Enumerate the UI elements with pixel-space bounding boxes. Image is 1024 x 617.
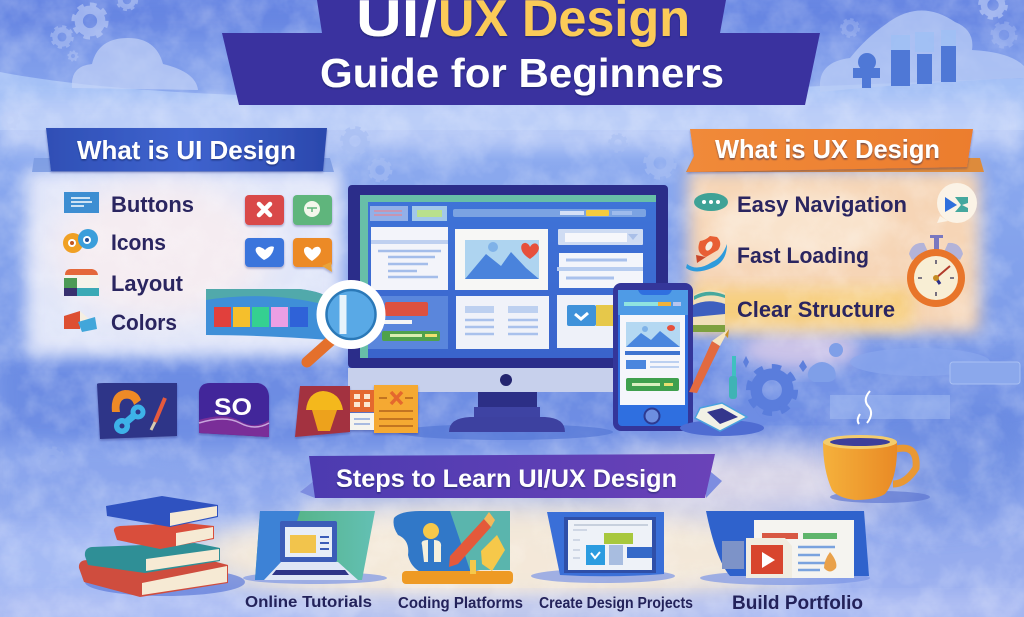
monitor bbox=[348, 185, 668, 440]
book: red middle bbox=[114, 523, 214, 549]
colour palette bar bbox=[206, 289, 330, 340]
step labels: Create Design Projects bbox=[539, 595, 693, 612]
monitor body bbox=[348, 185, 668, 368]
toolbar bbox=[370, 206, 646, 221]
icon: layout bbox=[64, 269, 99, 296]
label: Colors: Colors bbox=[111, 310, 177, 335]
monitor screen bbox=[360, 195, 656, 358]
phone home button bbox=[644, 408, 660, 424]
background gears and clouds bbox=[2, 0, 1024, 472]
heading: What is UX Design bbox=[686, 129, 984, 172]
book: blue top bbox=[106, 496, 218, 527]
panel: UI background bbox=[26, 170, 342, 356]
"SO" tile bbox=[199, 383, 269, 437]
pencil bbox=[689, 329, 729, 393]
coffee cup bbox=[823, 391, 930, 503]
panel: UX background bbox=[688, 170, 980, 332]
steam bbox=[858, 391, 871, 424]
UI button samples bbox=[245, 195, 332, 272]
step labels: Build Portfolio bbox=[732, 593, 863, 614]
icon: icons bbox=[63, 229, 98, 253]
phone bbox=[613, 283, 693, 431]
title line 2: Guide for Beginners bbox=[320, 50, 724, 96]
step 2: coding platforms icon bbox=[394, 511, 513, 584]
step labels bbox=[245, 593, 863, 614]
icon: buttons bbox=[64, 192, 99, 213]
card: two columns bbox=[456, 296, 549, 349]
tablet device bbox=[680, 403, 764, 436]
monitor stand bbox=[397, 392, 613, 440]
icon: rocket bbox=[686, 236, 727, 272]
step 4: portfolio icon bbox=[700, 511, 870, 585]
card: image bbox=[455, 229, 548, 290]
books stack bbox=[79, 496, 245, 597]
heading: What is UI Design bbox=[32, 128, 334, 172]
label: Easy Navigation: Easy Navigation bbox=[737, 192, 907, 217]
alarm clock bbox=[907, 235, 965, 307]
heading: Steps to Learn UI/UX Design bbox=[300, 454, 722, 498]
phone card bbox=[620, 315, 685, 405]
monitor chin bbox=[348, 368, 668, 392]
"SO" tile: SO bbox=[214, 394, 252, 421]
green minus button bbox=[293, 195, 332, 225]
title banner bbox=[222, 0, 820, 105]
tool palette icon bbox=[97, 383, 177, 439]
heading: What is UI Design: What is UI Design bbox=[77, 135, 296, 165]
step 3: design projects icon bbox=[531, 512, 675, 583]
label: Layout: Layout bbox=[111, 271, 184, 296]
label: Buttons: Buttons bbox=[111, 192, 194, 217]
card: toggle bbox=[557, 295, 627, 348]
teal tool bbox=[729, 356, 737, 399]
step 1: online tutorials icon bbox=[243, 511, 387, 584]
UX item list bbox=[686, 192, 907, 332]
UI item list bbox=[63, 192, 194, 335]
helmet and document icons bbox=[295, 385, 418, 437]
orange heart button bbox=[293, 238, 332, 272]
step labels: Online Tutorials bbox=[245, 594, 372, 611]
label: Clear Structure: Clear Structure bbox=[737, 297, 895, 322]
card: text bbox=[371, 227, 448, 290]
card: search bbox=[558, 229, 643, 245]
magnifying glass bbox=[307, 284, 381, 362]
icon: colors bbox=[64, 311, 97, 332]
card: colored controls bbox=[368, 296, 448, 349]
red close button bbox=[245, 195, 284, 225]
icon: navigation pill bbox=[694, 193, 728, 211]
card: list bbox=[557, 253, 643, 288]
speech bubble icon bbox=[937, 183, 977, 223]
label: Icons: Icons bbox=[111, 230, 166, 255]
heading: What is UX Design: What is UX Design bbox=[715, 134, 940, 164]
sparkles bbox=[743, 356, 807, 372]
book: teal bbox=[85, 543, 220, 573]
gear icon bbox=[750, 368, 794, 412]
blue heart button bbox=[245, 238, 284, 267]
label: Fast Loading: Fast Loading bbox=[737, 243, 869, 268]
step labels: Coding Platforms bbox=[398, 595, 523, 612]
icon: book stripes bbox=[693, 290, 725, 332]
book: red bottom bbox=[79, 559, 228, 597]
heading: Steps to Learn UI/UX Design: Steps to Learn UI/UX Design bbox=[336, 465, 677, 493]
